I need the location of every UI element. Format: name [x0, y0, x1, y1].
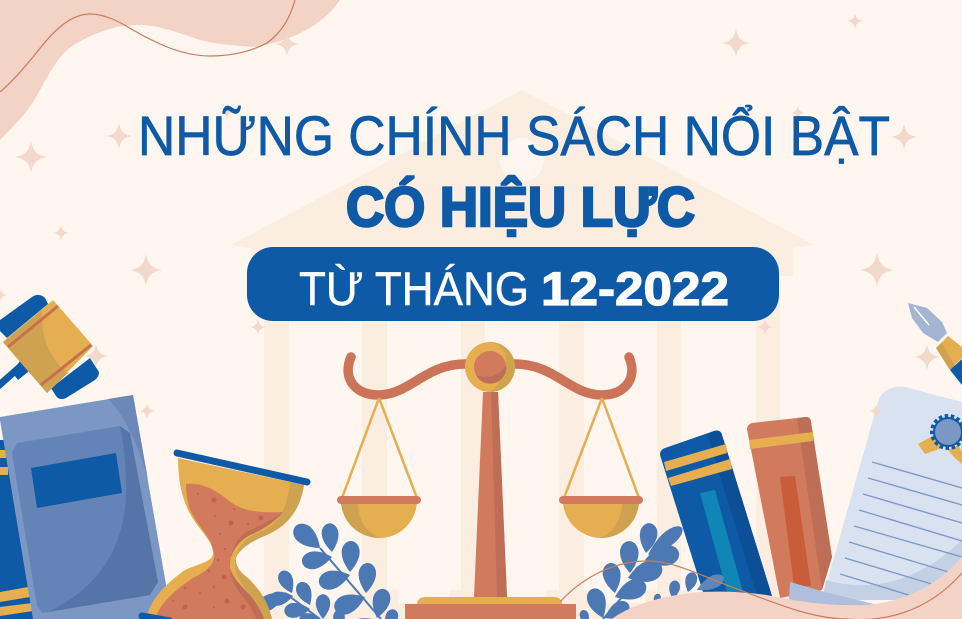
scale pivot [465, 342, 515, 392]
scale beam [348, 357, 632, 395]
icon: orange standing book [747, 417, 832, 598]
gavel stripes [8, 306, 91, 385]
icon: certificate document [788, 387, 962, 619]
date number: 12-2022 [541, 262, 729, 315]
book label [31, 453, 122, 508]
sparkle near pen [914, 344, 940, 370]
sparkle on document [869, 404, 883, 418]
right chains [564, 398, 639, 498]
bottom-right blob [612, 556, 962, 619]
icon: scales of justice [337, 342, 643, 619]
icon: fountain pen [908, 303, 962, 385]
hourglass sand [155, 484, 283, 619]
icon: left plant [254, 519, 400, 619]
gavel head [3, 300, 93, 393]
top-left curve line [0, 0, 295, 92]
sparkle over gavel [84, 344, 108, 368]
document text lines [840, 462, 962, 596]
title line 2: CÓ HIỆU LỰC [346, 175, 695, 238]
left chains [342, 398, 417, 498]
hourglass bottom cap [142, 616, 170, 619]
book inner panel [12, 426, 158, 613]
leaf over blue book [694, 571, 726, 596]
hourglass top cap [177, 453, 307, 482]
icon: gavel [0, 295, 99, 399]
icon: right plant [578, 522, 699, 619]
gavel caps [0, 295, 48, 338]
book red stripe [780, 476, 811, 586]
top-left blob [0, 0, 340, 140]
hourglass grains [172, 493, 264, 610]
document lavender sheet [788, 582, 878, 619]
icon: back blue book [0, 440, 40, 619]
hourglass glass [146, 458, 304, 619]
title line 1: NHỮNG CHÍNH SÁCH NỔI BẬT [138, 104, 890, 167]
date label: TỪ THÁNG [299, 262, 529, 315]
icon: large blue book [0, 395, 172, 619]
bottom-right curve line [560, 561, 962, 619]
icon: blue standing book [660, 431, 772, 596]
right pan [563, 503, 639, 538]
scale pole [474, 392, 507, 597]
document seal [918, 416, 962, 464]
icon: hourglass [142, 453, 307, 619]
gavel handle [0, 358, 30, 388]
temple backdrop [231, 90, 814, 619]
left pan [341, 503, 417, 538]
book teal stripe [700, 490, 743, 592]
date pill [247, 247, 779, 321]
sparkles [0, 13, 917, 419]
scale base [417, 597, 562, 604]
